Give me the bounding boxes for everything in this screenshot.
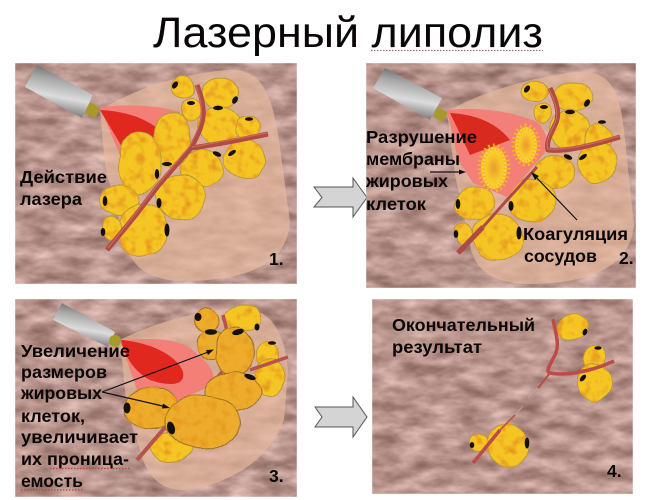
cell nuclei (470, 328, 602, 448)
label: membrane destruction (365, 127, 477, 214)
label: final result: результат (392, 337, 482, 357)
panel 1: laser action (15, 63, 297, 284)
label: cell enlargement (20, 341, 138, 491)
number 1: 1. (269, 249, 284, 269)
pointer arrows (102, 350, 214, 408)
blood vessel (137, 315, 288, 460)
fat cells (469, 314, 613, 466)
label: laser action (20, 167, 107, 209)
tissue area (120, 308, 288, 490)
label: membrane destruction: жировых (365, 171, 448, 191)
label: cell enlargement: Увеличение (21, 341, 130, 361)
label: vessel coagulation: Коагуляция (523, 224, 628, 244)
label: membrane destruction: клеток (366, 194, 426, 214)
label: laser action: Действие (20, 167, 107, 187)
fat cells (150, 306, 285, 462)
number 4: 4. (607, 461, 622, 481)
label: vessel coagulation (523, 224, 628, 266)
panel 3: cell enlargement (15, 299, 297, 497)
label: cell enlargement: увеличивает (21, 427, 138, 447)
ruptured fat cells (481, 127, 537, 189)
laser device (53, 303, 121, 347)
laser device (373, 68, 448, 122)
blood vessel (458, 88, 620, 253)
fat cells (101, 76, 265, 256)
laser beam (447, 109, 548, 197)
label: laser action: лазера (20, 189, 82, 209)
laser beam (120, 339, 214, 403)
laser device (25, 65, 100, 118)
blood vessel (473, 319, 614, 463)
tissue area (100, 70, 290, 281)
title: Лазерный липолиз (153, 10, 543, 57)
cell nuclei (454, 84, 606, 239)
number 2: 2. (619, 248, 634, 268)
arrow: step 1 to 2 (314, 178, 367, 217)
blood vessel (107, 85, 268, 250)
pointer arrows (430, 170, 577, 220)
label: cell enlargement: их проница- (21, 449, 129, 469)
panel 2: membrane destruction (365, 63, 636, 288)
label: membrane destruction: мембраны (366, 149, 460, 169)
label: membrane destruction: Разрушение (366, 127, 477, 147)
cell nuclei (101, 80, 253, 236)
label: cell enlargement: клеток, (21, 406, 85, 426)
arrow: step 3 to 4 (315, 397, 367, 437)
enlarged fat cells (125, 308, 261, 449)
fat cells (454, 81, 618, 261)
panel 4: final result (372, 299, 633, 494)
label: cell enlargement: жировых (20, 383, 102, 403)
label: cell enlargement: размеров (21, 362, 107, 382)
label: vessel coagulation: сосудов (524, 246, 597, 266)
label: final result: Окончательный (392, 315, 535, 335)
tissue area (447, 72, 634, 284)
laser beam (100, 105, 180, 168)
label: final result (392, 315, 535, 357)
cell nuclei (124, 313, 276, 435)
label: cell enlargement: емость (21, 471, 83, 491)
number 3: 3. (269, 466, 284, 486)
